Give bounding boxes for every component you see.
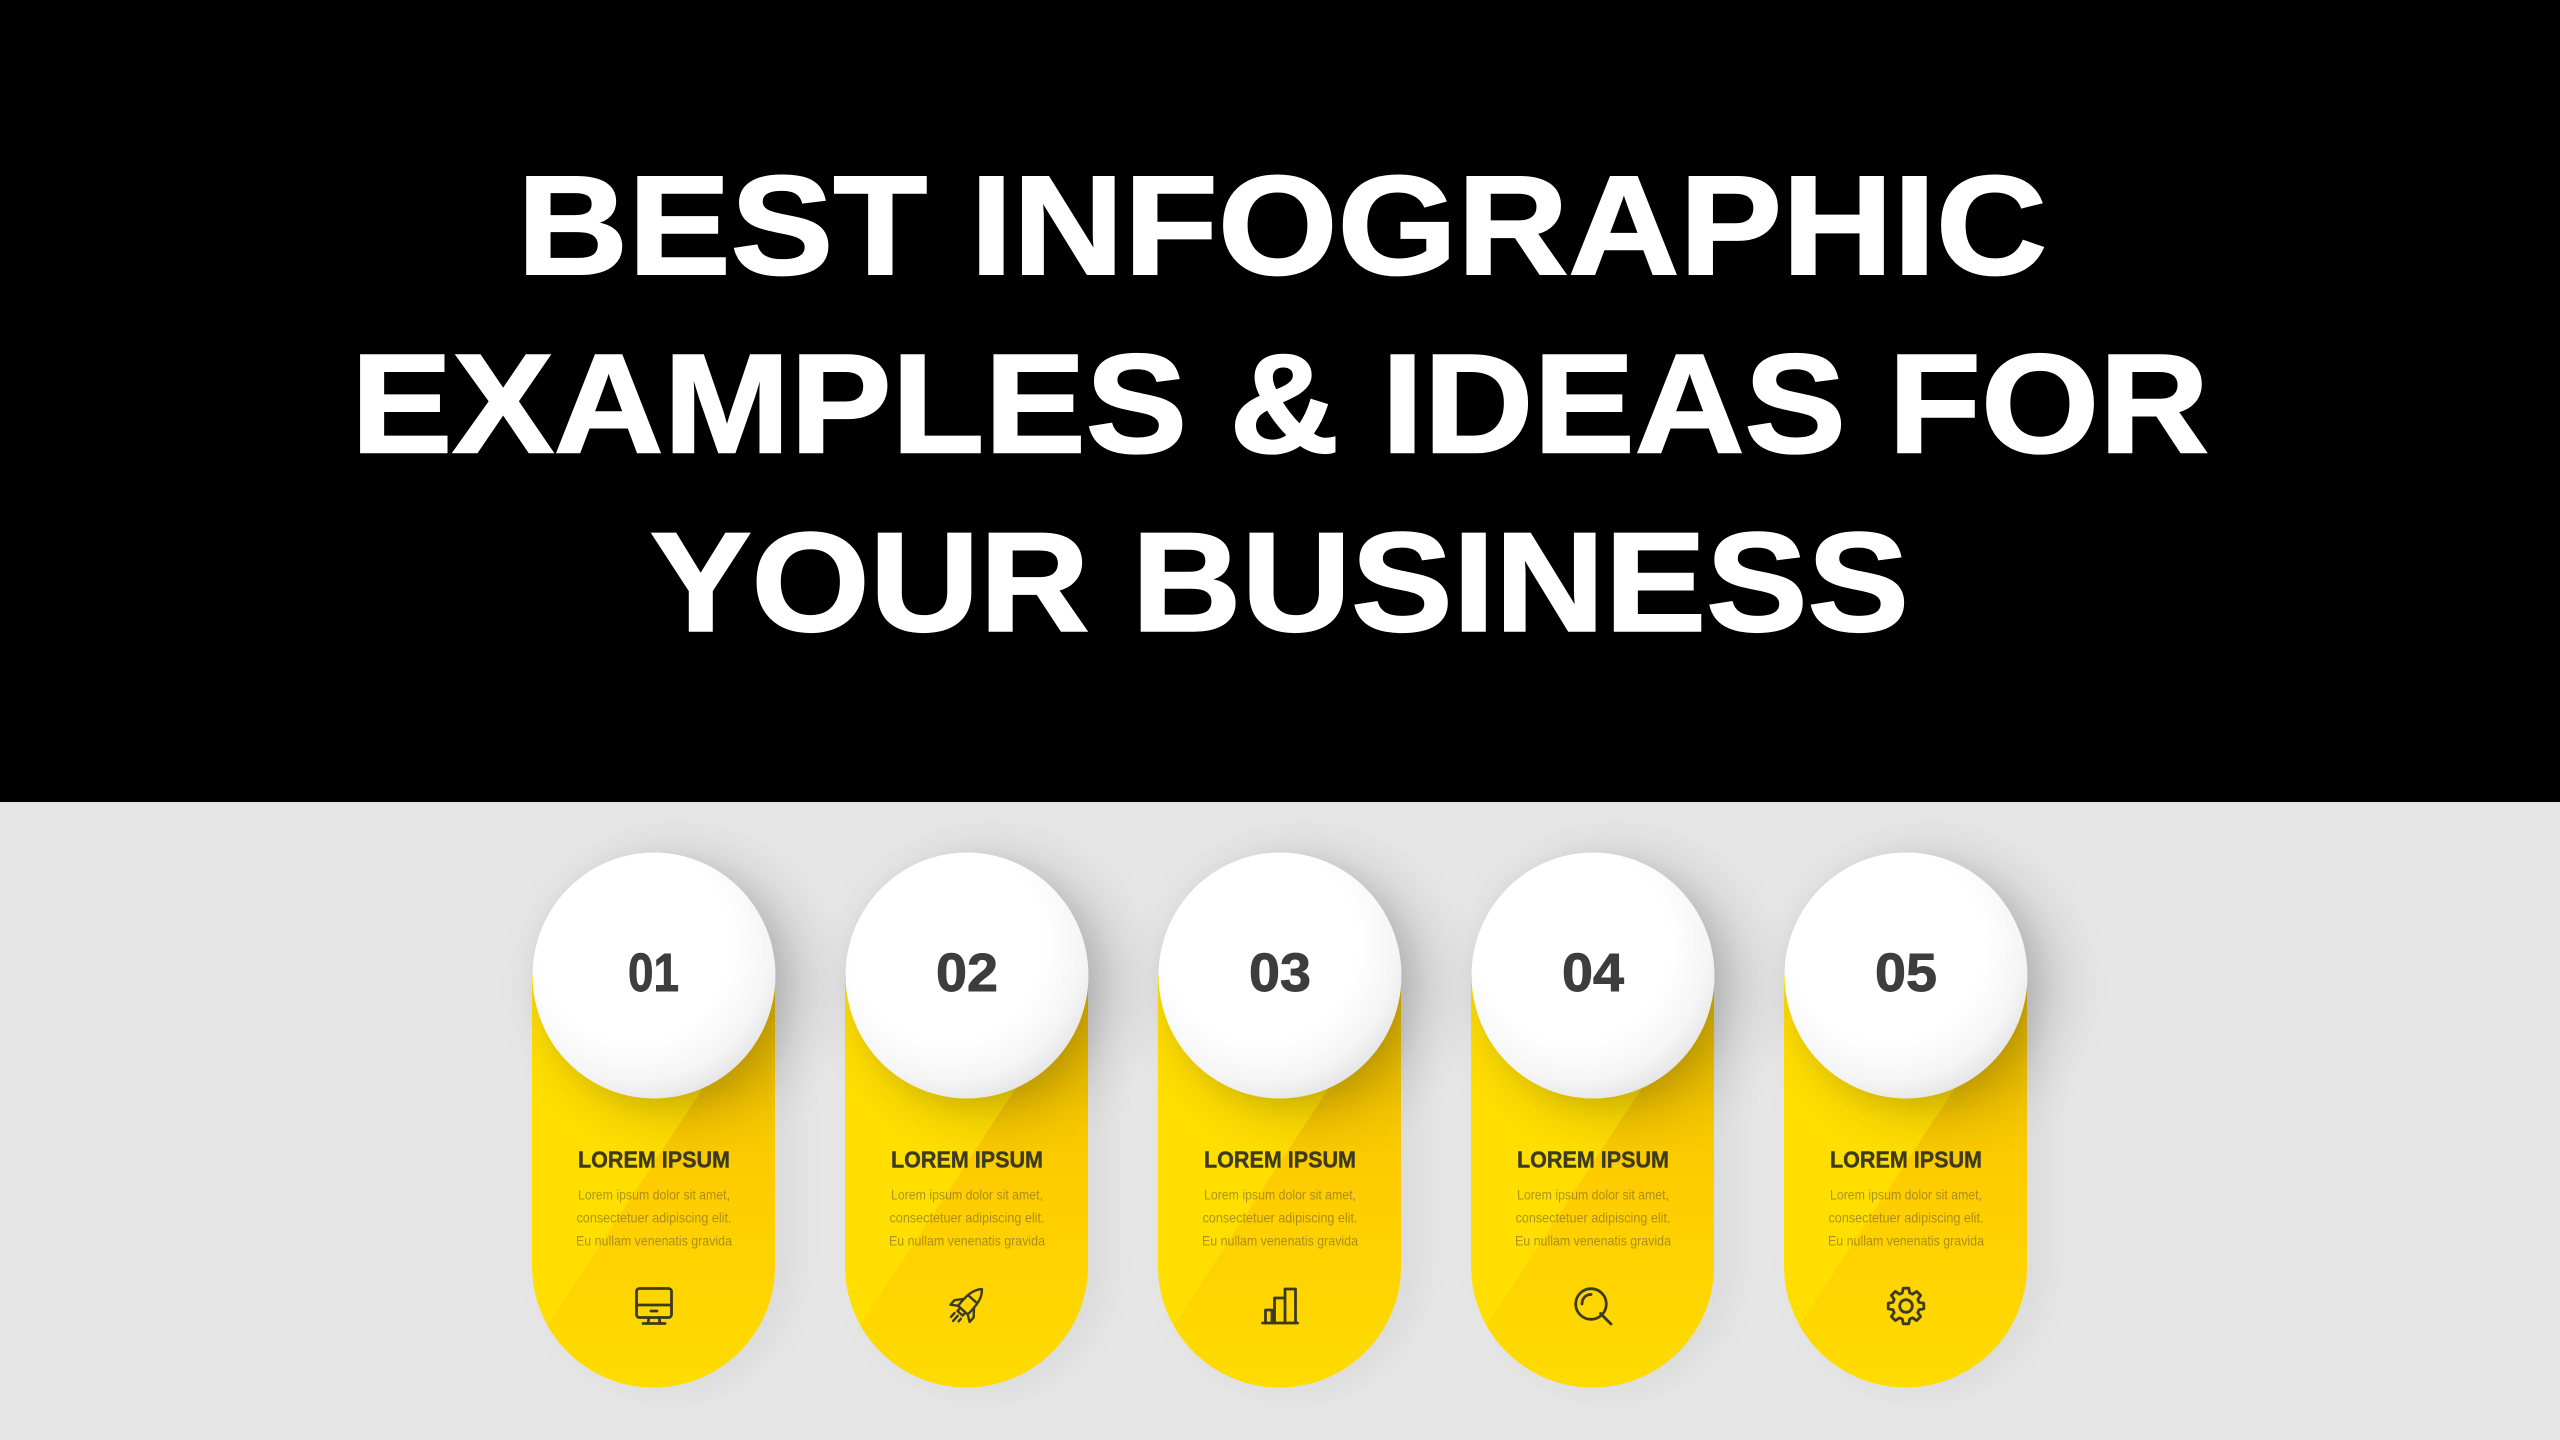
number circle — [1784, 852, 2028, 1098]
number circle: 05 — [1875, 944, 1937, 1003]
card body text: Lorem ipsum dolor sit amet, — [891, 1186, 1043, 1202]
card body text: Eu nullam venenatis gravida — [576, 1233, 732, 1249]
panel: card 05 — [1782, 852, 2052, 1400]
icon: monitor — [636, 1288, 672, 1324]
title: BEST INFOGRAPHIC — [517, 146, 2047, 304]
card body text: Lorem ipsum dolor sit amet, — [1517, 1186, 1669, 1202]
card body text: Lorem ipsum dolor sit amet, — [1204, 1186, 1356, 1202]
card body text: Eu nullam venenatis gravida — [1828, 1233, 1984, 1249]
card body text — [1202, 1186, 1358, 1249]
panel: card 02 — [843, 852, 1113, 1400]
panel: card 01 — [530, 852, 800, 1400]
card body text: consectetuer adipiscing elit. — [1828, 1209, 1984, 1225]
number circle — [532, 852, 776, 1098]
card body text: consectetuer adipiscing elit. — [1202, 1209, 1358, 1225]
number circle: 01 — [628, 944, 679, 1003]
number circle: 02 — [936, 944, 998, 1003]
number circle — [1158, 852, 1402, 1098]
card body text: consectetuer adipiscing elit. — [890, 1209, 1044, 1225]
title: YOUR BUSINESS — [650, 503, 1909, 661]
card body text — [889, 1186, 1045, 1249]
number circle — [1472, 852, 1714, 1098]
panel: card 03 — [1156, 852, 1426, 1400]
card heading: LOREM IPSUM — [1830, 1147, 1982, 1173]
card body text: consectetuer adipiscing elit. — [576, 1209, 732, 1225]
panel: card 04 — [1469, 852, 1739, 1400]
card heading: LOREM IPSUM — [891, 1147, 1043, 1173]
card heading: LOREM IPSUM — [1204, 1147, 1356, 1173]
title — [351, 146, 2209, 661]
number circle: 03 — [1249, 944, 1311, 1003]
card heading: LOREM IPSUM — [1517, 1147, 1669, 1173]
lower background — [0, 802, 2560, 1440]
card body text: Lorem ipsum dolor sit amet, — [1830, 1186, 1982, 1202]
number circle: 04 — [1562, 944, 1624, 1003]
icon: magnifier — [1576, 1289, 1611, 1324]
card body text — [1828, 1186, 1984, 1249]
icon: rocket — [944, 1280, 991, 1330]
card body text: Eu nullam venenatis gravida — [1515, 1233, 1671, 1249]
icon: gear — [1888, 1288, 1924, 1324]
title band — [0, 0, 2560, 802]
icon: bar chart — [1262, 1289, 1298, 1323]
card heading: LOREM IPSUM — [578, 1147, 730, 1173]
card body text: Eu nullam venenatis gravida — [889, 1233, 1045, 1249]
card body text: Eu nullam venenatis gravida — [1202, 1233, 1358, 1249]
card body text: consectetuer adipiscing elit. — [1516, 1209, 1670, 1225]
card body text: Lorem ipsum dolor sit amet, — [578, 1186, 730, 1202]
title: EXAMPLES & IDEAS FOR — [351, 324, 2209, 482]
number circle — [846, 852, 1088, 1098]
card body text — [1515, 1186, 1671, 1249]
card body text — [576, 1186, 732, 1249]
